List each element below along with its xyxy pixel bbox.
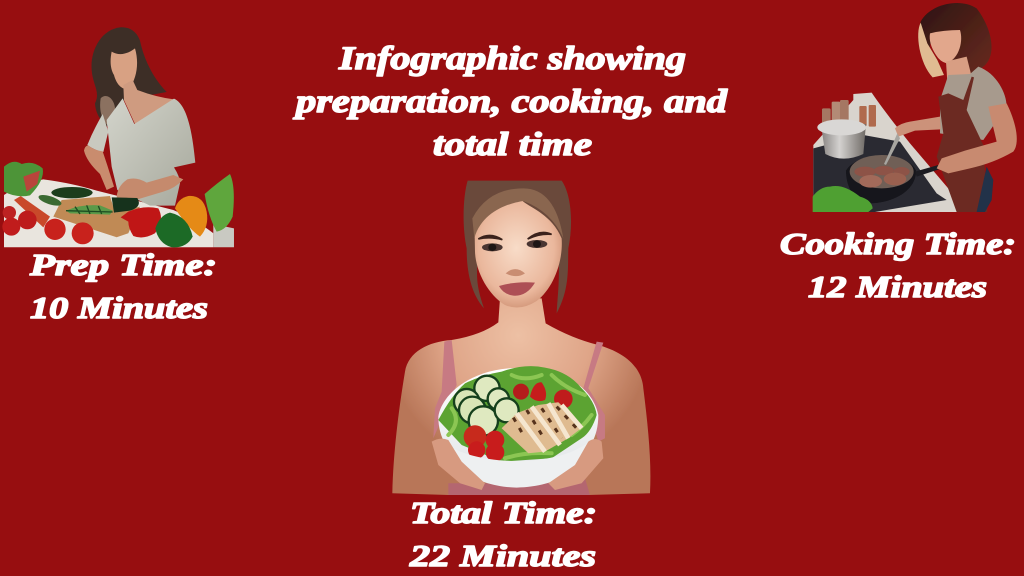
label: prep time: 10 Minutes bbox=[30, 290, 208, 325]
chest and arms bbox=[392, 298, 650, 495]
label: cooking time bbox=[780, 226, 1016, 304]
illustration: woman cooking at the stove bbox=[813, 3, 1017, 212]
illustration: woman preparing vegetables bbox=[2, 27, 234, 247]
title bbox=[292, 41, 728, 163]
label: total time: 22 Minutes bbox=[409, 538, 596, 573]
label: total time bbox=[409, 495, 597, 573]
label: prep time bbox=[29, 247, 217, 325]
label: prep time: Prep Time: bbox=[29, 247, 217, 282]
illustration: woman holding a salad bowl bbox=[392, 181, 650, 495]
label: cooking time: Cooking Time: bbox=[780, 226, 1016, 261]
title: total time bbox=[433, 127, 592, 163]
label: cooking time: 12 Minutes bbox=[808, 269, 987, 304]
label: total time: Total Time: bbox=[410, 495, 597, 530]
title: Infographic showing bbox=[338, 41, 686, 77]
title: preparation, cooking, and bbox=[292, 84, 728, 120]
